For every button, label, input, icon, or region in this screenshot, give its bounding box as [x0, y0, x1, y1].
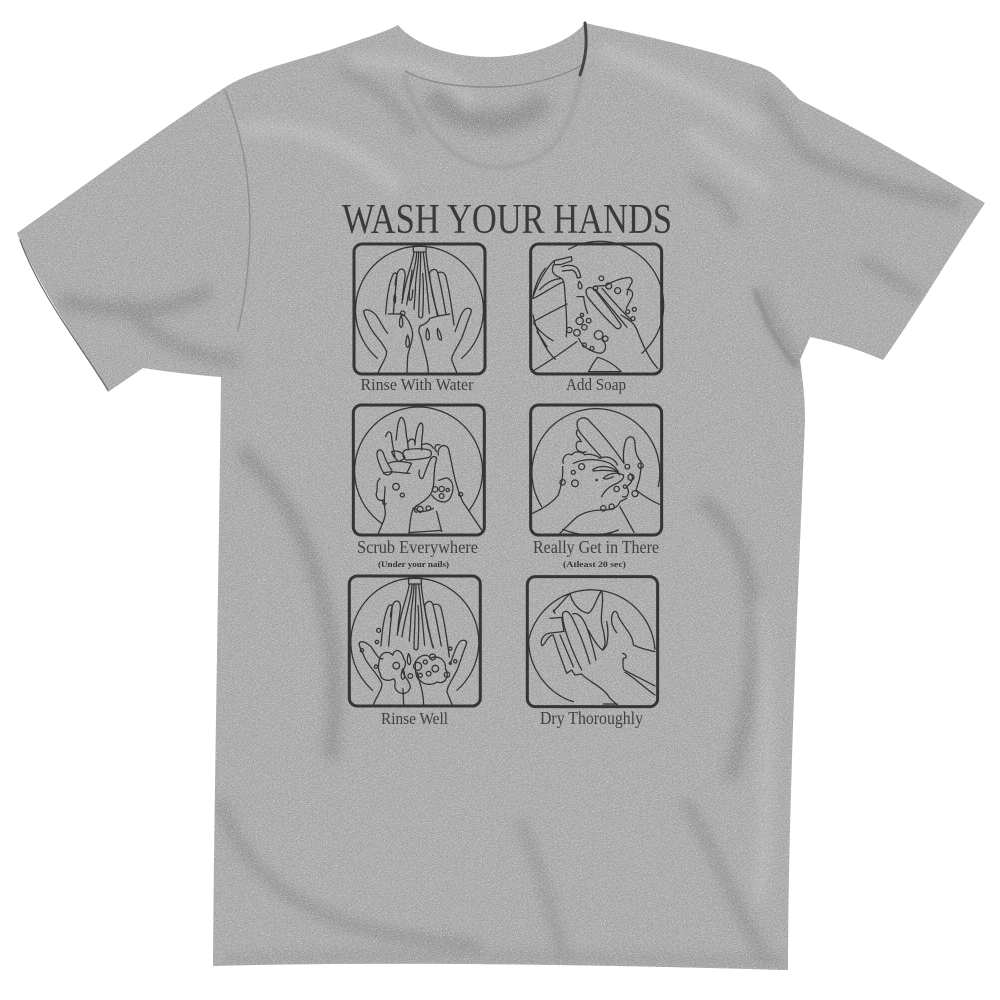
neckline seams — [20, 23, 795, 390]
icon: scrubbing hands — [376, 418, 463, 533]
panel: rinse well — [349, 576, 480, 706]
caption: really get in there: Really Get in There — [533, 537, 659, 557]
sub-caption: at least 20 sec: (Atleast 20 sec) — [563, 559, 626, 569]
icon: soap dispenser and lathered hands — [532, 257, 658, 372]
caption: add soap: Add Soap — [566, 375, 626, 394]
panel: rinse with water — [354, 244, 485, 374]
icon: interlaced hands — [533, 418, 659, 533]
title: WASH YOUR HANDS — [342, 197, 672, 243]
panel: add soap — [531, 241, 664, 374]
panel: scrub everywhere — [353, 405, 484, 535]
caption: dry thoroughly: Dry Thoroughly — [540, 708, 643, 728]
icon: hands and towel — [541, 591, 655, 705]
panel: really get in there — [531, 405, 662, 535]
caption: rinse well: Rinse Well — [381, 709, 448, 728]
sub-caption: under your nails: (Under your nails) — [378, 559, 449, 569]
icon: lathered hands under water — [359, 578, 467, 704]
icon: hands under water — [364, 246, 471, 372]
caption: scrub everywhere: Scrub Everywhere — [357, 537, 478, 557]
panel: dry thoroughly — [527, 577, 658, 707]
caption: rinse with water: Rinse With Water — [360, 375, 474, 394]
